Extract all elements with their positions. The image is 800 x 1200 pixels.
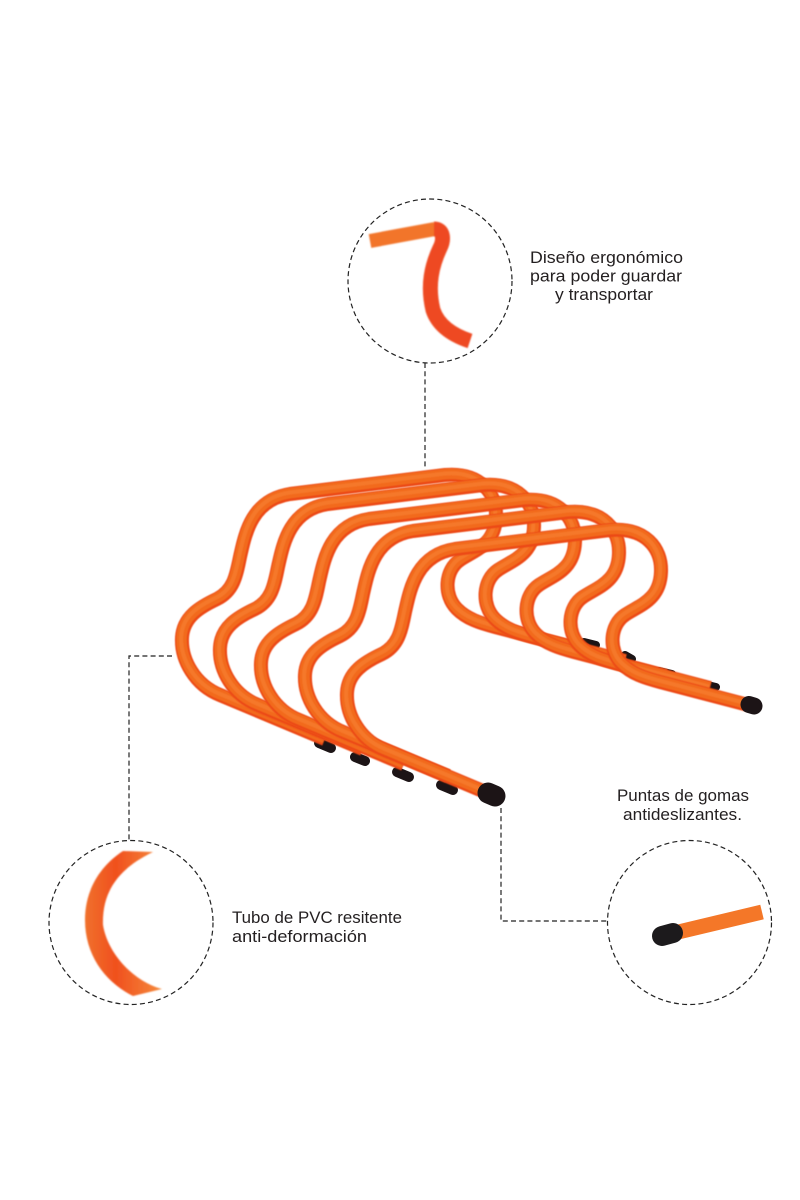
- connector: left circle to hurdles: [129, 656, 172, 841]
- callout circle: PVC tube: [49, 840, 213, 1004]
- hurdle 1 (back): [181, 473, 587, 739]
- rubber tip: front right foot: [749, 704, 754, 706]
- hurdle 3: [260, 498, 666, 764]
- text: rubber tips: antideslizantes.: [623, 806, 742, 824]
- text: ergonomic design: y transportar: [555, 286, 654, 304]
- detail: tube curve: [85, 851, 162, 996]
- detail: rubber cap: [662, 933, 673, 936]
- text: PVC tube: [232, 909, 402, 946]
- text: PVC tube: anti-deformación: [232, 928, 367, 946]
- product: five orange hurdles: [181, 473, 754, 796]
- text: rubber tips: [617, 787, 749, 824]
- connector: top circle to hurdles: [424, 363, 426, 468]
- hurdle 4: [304, 510, 710, 776]
- hurdle 5 (front): [346, 528, 752, 794]
- detail: hurdle bend: [370, 229, 470, 341]
- text: ergonomic design: para poder guardar: [530, 268, 683, 286]
- detail: tube segment: [672, 912, 762, 934]
- text: ergonomic design: Diseño ergonómico: [530, 249, 683, 267]
- text: rubber tips: Puntas de gomas: [617, 787, 749, 805]
- callout circle: ergonomic design: [348, 199, 512, 363]
- hidden rubber tips under the left feet: [319, 743, 453, 790]
- hurdle 2: [219, 483, 625, 749]
- rubber tip: front left foot: [488, 793, 495, 796]
- hidden rubber tips under the right feet: [584, 642, 716, 687]
- text: PVC tube: Tubo de PVC resitente: [232, 909, 402, 927]
- connector: right circle to rubber tip: [501, 808, 607, 921]
- callout circle: rubber tips: [608, 840, 772, 1004]
- text: ergonomic design: [530, 249, 683, 304]
